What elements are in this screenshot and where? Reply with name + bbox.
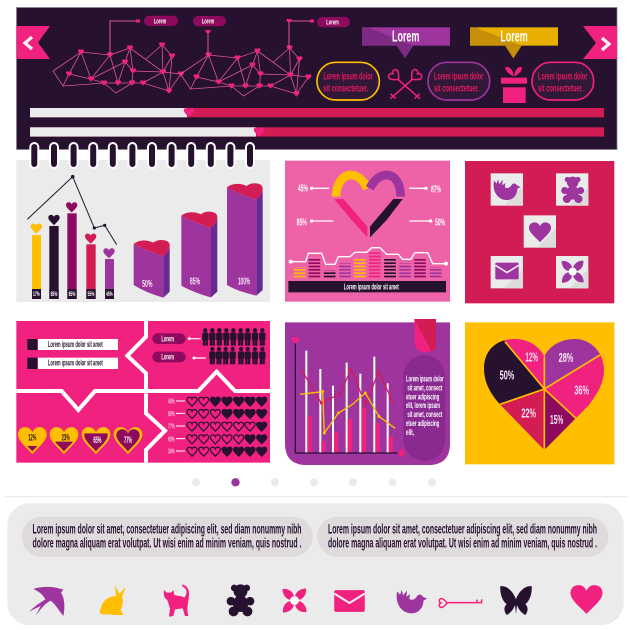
callout: yellow banner: Lorem bbox=[500, 28, 528, 45]
callout: purple banner bbox=[362, 27, 450, 58]
heart rating rows: 65% bbox=[168, 434, 175, 443]
notebook spiral rings bbox=[30, 143, 254, 168]
text oval: purple bbox=[428, 62, 490, 100]
panel: purple line chart bbox=[285, 319, 450, 465]
heart gauges: 65% bbox=[93, 435, 101, 445]
icon: swallow bbox=[29, 587, 64, 616]
pie labels: 28% bbox=[559, 350, 573, 365]
callout: purple banner: Lorem bbox=[392, 28, 419, 45]
heart gauges bbox=[18, 427, 142, 454]
tile: bear bbox=[556, 173, 588, 206]
heart percent labels: 45% bbox=[298, 184, 308, 195]
text row 2 bbox=[27, 358, 118, 369]
icon: gift box bbox=[501, 67, 527, 103]
text capsule: elit, bbox=[406, 427, 414, 437]
text capsule: elit, lorem ipsum bbox=[406, 400, 440, 410]
network label 2 bbox=[193, 16, 226, 26]
text oval: purple: Lorem ipsum dolor bbox=[434, 71, 483, 82]
text capsule: etuer adipiscing bbox=[406, 418, 439, 428]
text pill 1: Lorem ipsum dolor sit amet, consectetuer adipiscing elit, sed diam nonummy nibh bbox=[32, 522, 302, 536]
text capsule: Lorem ipsum dolor bbox=[406, 374, 444, 384]
text oval: pink bbox=[532, 62, 594, 100]
line over bars bbox=[27, 175, 117, 245]
combo chart bbox=[291, 337, 404, 457]
heart gauges: 23% bbox=[62, 432, 70, 442]
icon: butterfly bbox=[500, 586, 532, 615]
heart percent labels: 85% bbox=[297, 217, 307, 228]
tile: envelope bbox=[491, 256, 523, 288]
text capsule: etuer adipiscing bbox=[406, 391, 439, 401]
heart rating rows: 60% bbox=[168, 409, 175, 418]
text pill 1 bbox=[22, 517, 313, 557]
network label 3 bbox=[317, 17, 350, 27]
heart gauges: 12% bbox=[28, 432, 36, 442]
panel: icon tiles bbox=[465, 161, 614, 303]
segmented heart bbox=[334, 175, 403, 237]
heart column 85% bbox=[181, 212, 217, 297]
progress bar 1 bbox=[30, 108, 604, 117]
callout: yellow banner bbox=[470, 27, 558, 58]
heart rating rows: 34% bbox=[168, 447, 175, 456]
tile: flower bbox=[556, 256, 588, 288]
icon: key bbox=[439, 598, 482, 607]
white trend line bbox=[289, 248, 448, 266]
heart percent labels: 50% bbox=[435, 217, 445, 228]
network label 2: Lorem bbox=[202, 17, 214, 26]
icon: heart bbox=[570, 585, 602, 614]
pie labels: 12% bbox=[525, 349, 538, 364]
pie slices bbox=[484, 339, 604, 450]
progress bar 2 bbox=[30, 127, 604, 137]
pie labels bbox=[500, 349, 589, 427]
text oval: yellow: Lorem ipsum dolor bbox=[323, 71, 373, 82]
text oval: pink: Lorem ipsum dolor bbox=[538, 71, 587, 82]
network diagram bbox=[53, 19, 314, 97]
caption bar bbox=[288, 281, 446, 292]
pie labels: 36% bbox=[574, 382, 589, 397]
pie labels: 15% bbox=[550, 412, 563, 427]
pagination dots bbox=[192, 478, 436, 486]
pie labels: 50% bbox=[500, 368, 514, 383]
people label 1 bbox=[152, 333, 186, 344]
left ribbon arrow bbox=[16, 26, 50, 59]
heart column 100%: 100% bbox=[238, 276, 250, 287]
heart rating rows: 45% bbox=[168, 397, 175, 406]
text capsule bbox=[403, 355, 445, 461]
heart rating rows: 77% bbox=[168, 422, 175, 431]
heart percent labels bbox=[297, 184, 445, 228]
right ribbon arrow bbox=[583, 26, 617, 59]
icon: envelope bbox=[334, 590, 365, 612]
panel: bottom bbox=[7, 503, 624, 625]
icon: teddy bear bbox=[227, 584, 254, 616]
icon: rabbit bbox=[100, 585, 126, 615]
panel: bar charts bbox=[16, 160, 270, 302]
panel: heart gauge bbox=[285, 161, 450, 302]
text oval: purple: sit consectetuer. bbox=[434, 83, 479, 94]
bookmark bbox=[414, 319, 436, 352]
text pill 2 bbox=[317, 517, 608, 557]
text pill 1: dolore magna aliquam erat volutpat. Ut wisi enim ad minim veniam, quis nostrud . bbox=[32, 536, 302, 550]
text row 1 bbox=[27, 339, 118, 350]
panel: heart pie chart bbox=[465, 322, 630, 464]
text oval: yellow: sit consectetuer. bbox=[323, 83, 368, 94]
text row 2: Lorem ipsum dolor sit amet bbox=[48, 358, 103, 368]
panel: people and hearts bbox=[16, 321, 270, 463]
people label 2: Lorem bbox=[161, 352, 174, 362]
tile: dove bbox=[491, 173, 523, 206]
network label 1 bbox=[144, 16, 178, 26]
icon: cat bbox=[164, 585, 189, 617]
text capsule: sit amet, consect bbox=[407, 382, 442, 392]
bar chart with hearts: 85% bbox=[51, 291, 58, 298]
people label 1: Lorem bbox=[161, 333, 174, 343]
network label 3: Lorem bbox=[326, 18, 339, 27]
equalizer chart bbox=[300, 252, 436, 277]
icon: flower bbox=[283, 589, 306, 612]
bar chart with hearts: 85% bbox=[69, 291, 76, 298]
bar chart with hearts: 45% bbox=[106, 291, 113, 298]
icon: dove bbox=[397, 590, 427, 613]
heart column 85%: 85% bbox=[190, 276, 200, 287]
text oval: pink: sit consectetuer. bbox=[538, 83, 583, 94]
bar chart with hearts: 55% bbox=[88, 291, 95, 298]
tile: heart bbox=[524, 215, 556, 248]
panel: header bbox=[16, 8, 617, 150]
people pictogram rows bbox=[188, 328, 265, 364]
heart gauges: 77% bbox=[124, 435, 132, 445]
heart column 50% bbox=[134, 240, 170, 298]
icon: crossed keys bbox=[387, 68, 423, 99]
heart column 50%: 50% bbox=[142, 279, 153, 290]
heart column 100% bbox=[227, 183, 263, 296]
text capsule: sit amet, consect bbox=[407, 409, 442, 419]
heart rating rows bbox=[168, 397, 267, 456]
pie labels: 22% bbox=[521, 406, 536, 421]
people label 2 bbox=[152, 352, 186, 362]
text row 1: Lorem ipsum dolor sit amet bbox=[48, 339, 103, 349]
heart percent labels: 87% bbox=[431, 185, 441, 196]
caption bar: Lorem ipsum dolor sit amet bbox=[344, 281, 399, 291]
bar chart with hearts bbox=[31, 202, 115, 299]
bar chart with hearts: 17% bbox=[33, 291, 40, 298]
text oval: yellow bbox=[317, 62, 379, 100]
network label 1: Lorem bbox=[154, 16, 166, 25]
